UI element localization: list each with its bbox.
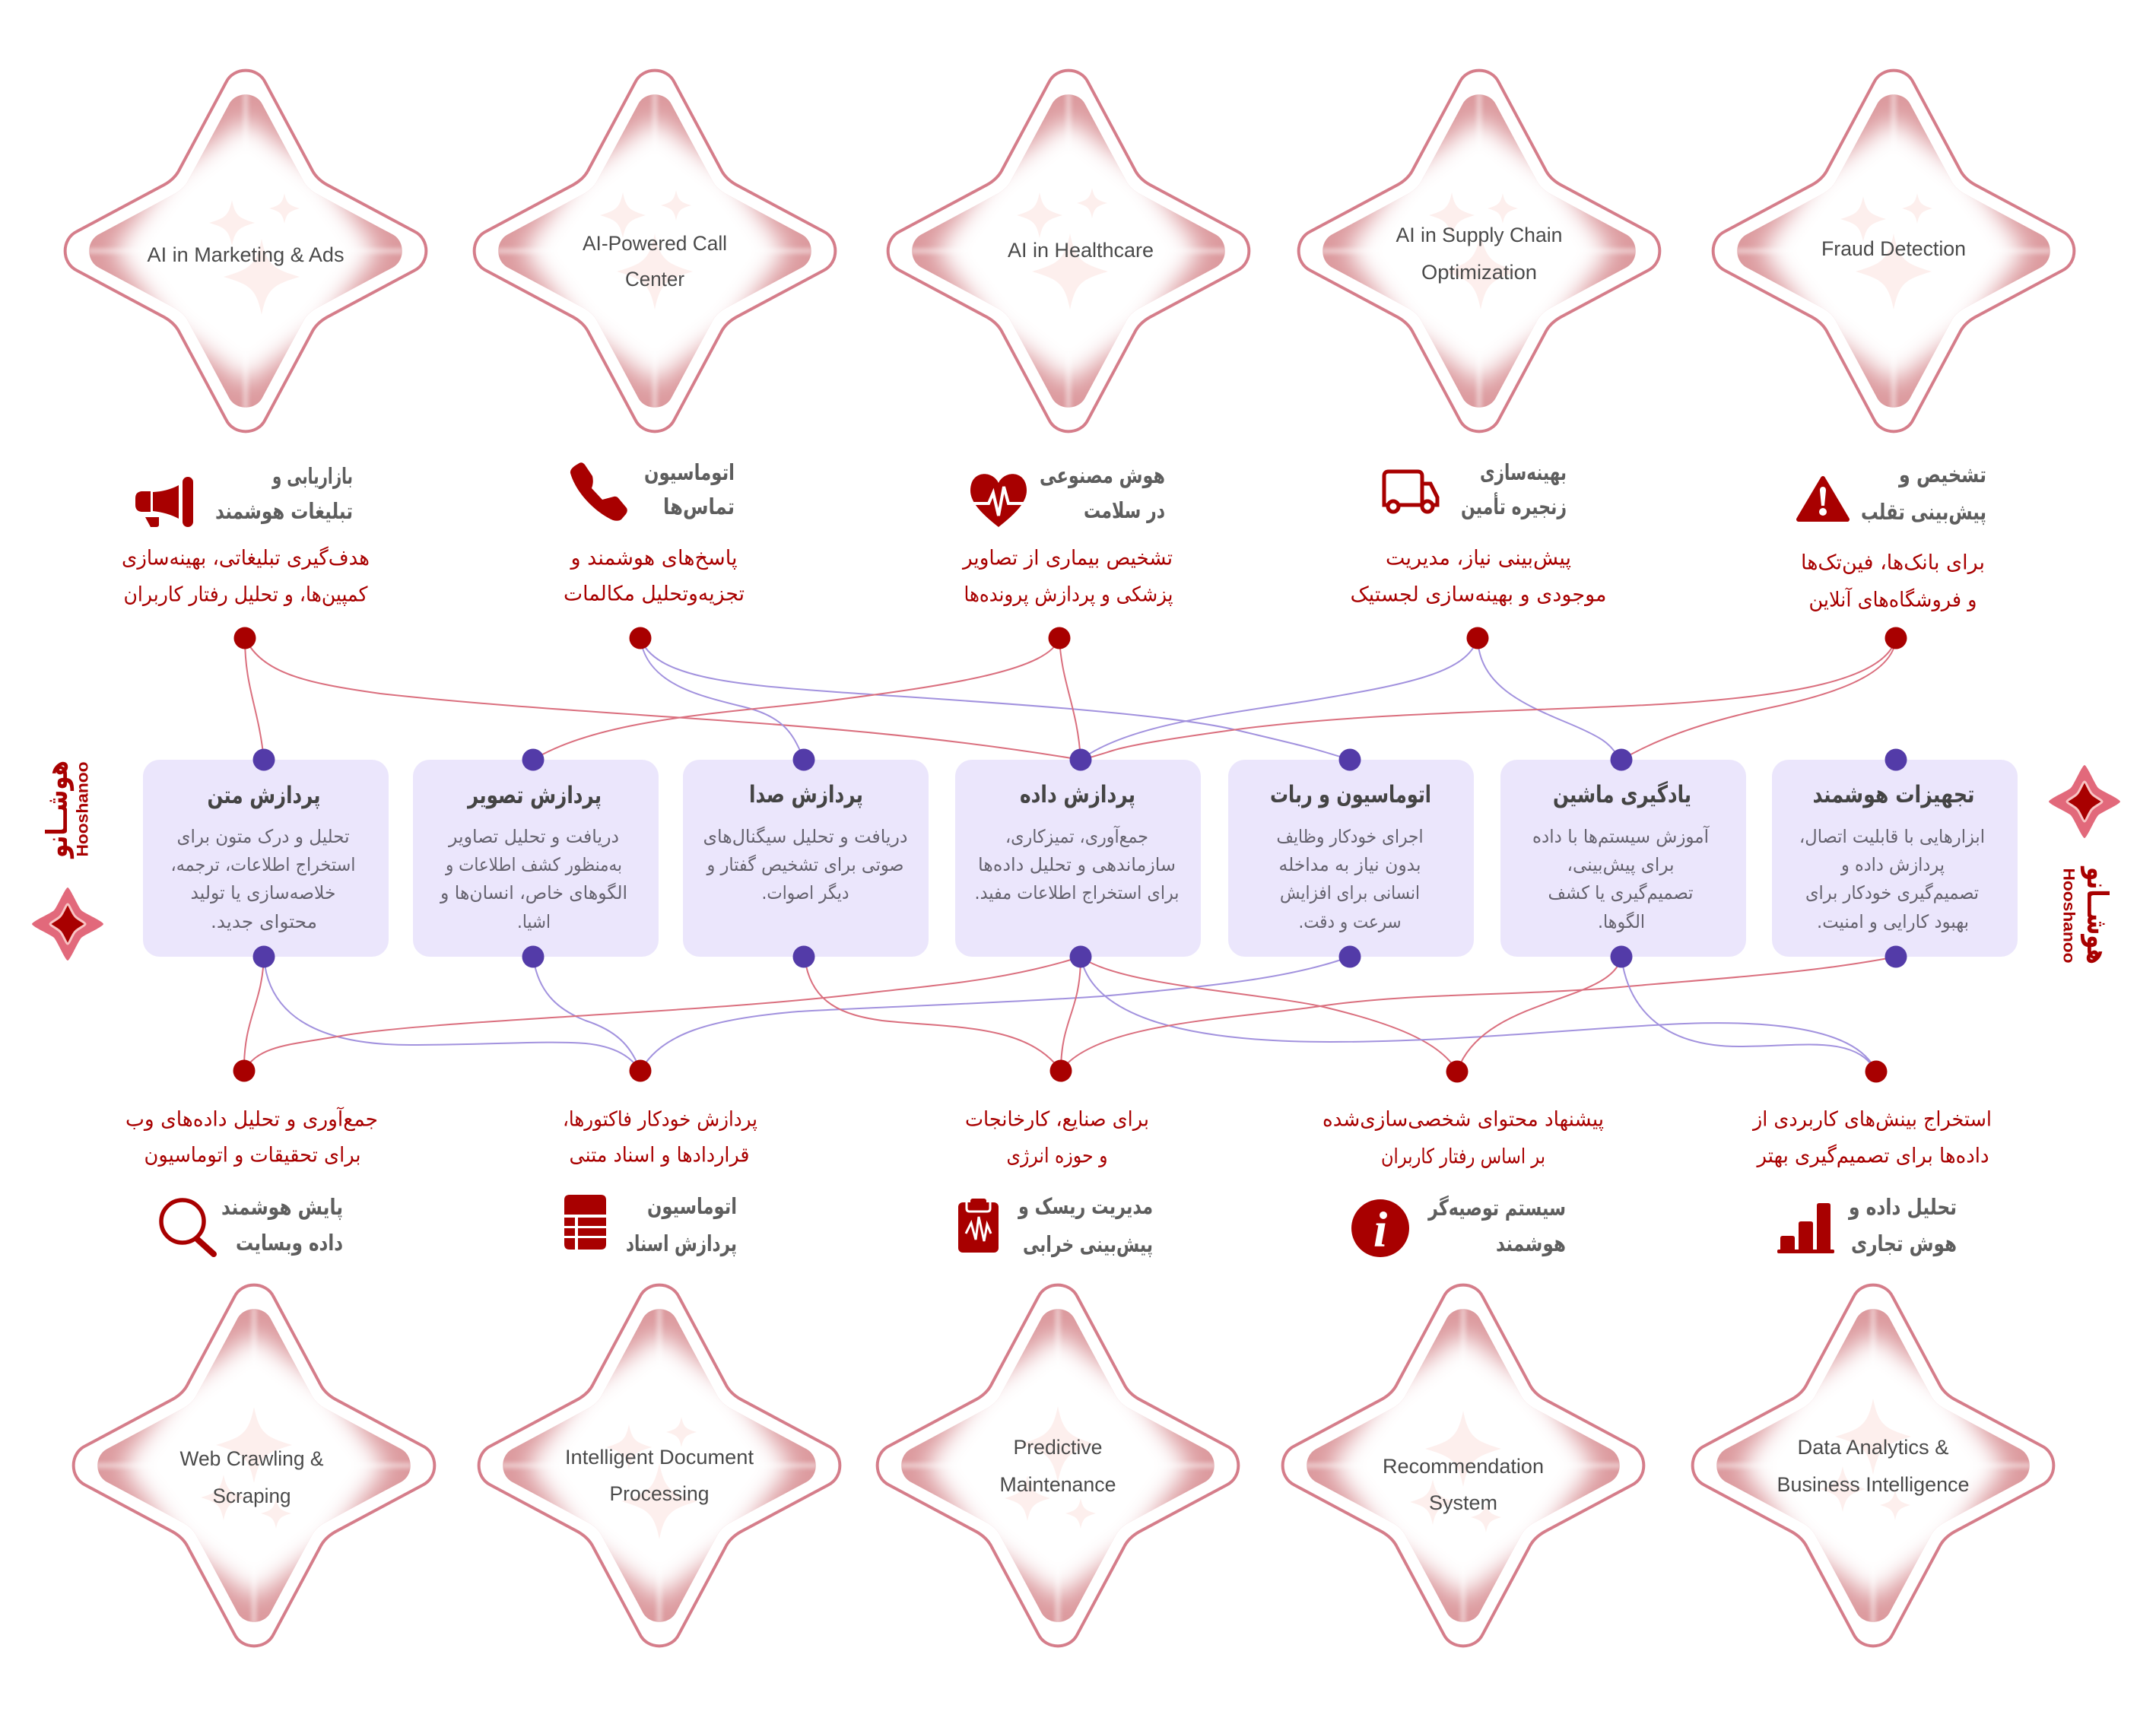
card: machine learning: یادگیری ماشین — [1553, 780, 1691, 808]
heading — [1461, 459, 1567, 519]
card: automation and robotics — [1228, 760, 1474, 957]
card: data processing: سازماندهی و تحلیل داده‌ها — [978, 854, 1176, 875]
card: image processing: اشیا. — [517, 911, 551, 932]
description: برای تحقیقات و اتوماسیون — [144, 1144, 360, 1167]
description — [1801, 551, 1985, 611]
card: audio processing: صوتی برای تشخیص گفتار و — [706, 854, 903, 875]
icon: truck — [1384, 472, 1437, 512]
description — [961, 546, 1173, 607]
card: text processing — [143, 760, 389, 957]
card: text processing: استخراج اطلاعات، ترجمه، — [170, 854, 356, 875]
card: image processing: پردازش تصویر — [466, 782, 602, 809]
card: image processing — [413, 760, 659, 957]
card: automation and robotics: اجرای خودکار وظایف — [1276, 826, 1424, 847]
description — [564, 546, 745, 605]
logo left: star and wordmark: Hooshanoo — [75, 762, 91, 856]
heading: اتوماسیون — [644, 459, 735, 485]
panel: AI in Supply Chain Optimization star: Optimization — [1421, 261, 1537, 284]
description: جمع‌آوری و تحلیل داده‌های وب — [125, 1107, 378, 1132]
heading: تبلیغات هوشمند — [215, 498, 353, 524]
panel: Web Crawling & Scraping star — [74, 1285, 434, 1646]
description: استخراج بینش‌های کاربردی از — [1751, 1107, 1992, 1132]
description: پیشنهاد محتوای شخصی‌سازی‌شده — [1322, 1107, 1604, 1132]
top connector dots — [234, 627, 1907, 649]
panel: Recommendation System star — [1283, 1285, 1643, 1646]
card: smart devices: ابزارهایی با قابلیت اتصال، — [1799, 826, 1985, 847]
heading: تشخیص و — [1897, 462, 1986, 487]
heading: هوش مصنوعی — [1040, 462, 1165, 488]
logo right: star and wordmark: هوشــانو — [2081, 865, 2114, 964]
card: text processing: تحلیل و درک متون برای — [176, 826, 350, 847]
panel: Web Crawling & Scraping star: Web Crawling & — [179, 1447, 324, 1470]
column: marketing heading, icon and description — [122, 463, 370, 607]
card: data processing — [955, 760, 1201, 957]
description: داده‌ها برای تصمیم‌گیری بهتر — [1756, 1144, 1989, 1168]
heading — [1861, 462, 1986, 526]
panel: Data Analytics & Business Intelligence star — [1693, 1285, 2053, 1646]
card: image processing: دریافت و تحلیل تصاویر — [448, 826, 619, 847]
card: audio processing: دیگر اصوات. — [762, 882, 849, 903]
heading: هوش تجاری — [1851, 1231, 1957, 1256]
heading — [1040, 462, 1165, 523]
description: و فروشگاه‌های آنلاین — [1808, 587, 1977, 611]
description — [965, 1107, 1149, 1168]
description: موجودی و بهینه‌سازی لجستیک — [1351, 583, 1606, 607]
card: audio processing: دریافت و تحلیل سیگنال‌های — [703, 826, 908, 847]
heading: پیش‌بینی خرابی — [1023, 1231, 1153, 1258]
description — [563, 1107, 757, 1167]
column: web scraping description, icon and heading — [125, 1107, 378, 1256]
heading: در سلامت — [1084, 497, 1165, 523]
column: analytics description, icon and heading — [1751, 1107, 1992, 1256]
description: برای بانک‌ها، فین‌تک‌ها — [1801, 551, 1985, 575]
heading: تحلیل داده و — [1847, 1194, 1957, 1220]
panel: AI in Supply Chain Optimization star: AI in Supply Chain — [1396, 224, 1562, 246]
heading — [626, 1193, 737, 1257]
description: و حوزه انرژی — [1007, 1144, 1107, 1168]
panel: Intelligent Document Processing star — [479, 1285, 840, 1646]
logo right: star and wordmark — [2049, 765, 2120, 964]
heading: اتوماسیون — [647, 1193, 737, 1219]
panel: AI-Powered Call Center star: AI-Powered Call — [583, 232, 727, 255]
card: automation and robotics: اتوماسیون و ربات — [1270, 781, 1431, 808]
panel: AI in Marketing & Ads star — [65, 71, 426, 431]
heading: داده وبسایت — [236, 1230, 343, 1256]
card: smart devices: پردازش داده و — [1840, 854, 1945, 875]
panel: Intelligent Document Processing star: Intelligent Document — [565, 1446, 754, 1469]
column: healthcare heading, icon and description — [961, 462, 1173, 607]
icon: warning triangle — [1799, 478, 1847, 519]
panel: Predictive Maintenance star: Predictive — [1013, 1436, 1103, 1459]
card: text processing: محتوای جدید. — [211, 911, 317, 932]
description: تشخیص بیماری از تصاویر — [961, 546, 1173, 570]
heading: پیش‌بینی تقلب — [1861, 499, 1986, 526]
card: machine learning: تصمیم‌گیری یا کشف — [1548, 882, 1693, 903]
card: audio processing: پردازش صدا — [749, 781, 863, 808]
panel: AI in Supply Chain Optimization star — [1299, 71, 1659, 431]
icon: document table — [564, 1195, 606, 1250]
card: image processing: الگوهای خاص، انسان‌ها و — [440, 882, 627, 903]
card: smart devices: تصمیم‌گیری خودکار برای — [1805, 882, 1979, 903]
icon: phone — [570, 462, 627, 521]
card: automation and robotics: انسانی برای افزایش — [1280, 882, 1420, 903]
heading — [644, 459, 735, 519]
description — [1322, 1107, 1604, 1168]
card: image processing: به‌منظور کشف اطلاعات و — [445, 854, 622, 875]
card: smart devices: تجهیزات هوشمند — [1813, 781, 1974, 808]
card: text processing: پردازش متن — [207, 782, 321, 809]
description: هدف‌گیری تبلیغاتی، بهینه‌سازی — [122, 546, 370, 570]
card: automation and robotics: بدون نیاز به مداخله — [1279, 854, 1421, 875]
description: پزشکی و پردازش پرونده‌ها — [964, 583, 1173, 607]
column: call center heading, icon and description — [564, 459, 745, 605]
description — [1351, 546, 1606, 607]
panel: Data Analytics & Business Intelligence star: Data Analytics & — [1798, 1436, 1948, 1459]
panel: Data Analytics & Business Intelligence star: Business Intelligence — [1777, 1473, 1970, 1496]
panel: Recommendation System star: System — [1429, 1491, 1497, 1514]
icon: magnifier — [161, 1200, 214, 1254]
icon: info circle: i — [1373, 1202, 1388, 1258]
connector lines: top row to processing cards — [245, 638, 1896, 760]
card: machine learning: برای پیش‌بینی، — [1567, 854, 1675, 875]
heading: بازاریابی و — [271, 463, 353, 489]
logo right: star and wordmark: Hooshanoo — [2059, 869, 2078, 963]
logo left: star and wordmark — [32, 761, 103, 961]
heading — [1427, 1195, 1566, 1256]
description: بر اساس رفتار کاربران — [1381, 1145, 1545, 1168]
column: document processing description, icon and heading — [563, 1107, 757, 1257]
column: recommendation description, icon and heading — [1322, 1107, 1604, 1258]
card: data processing: پردازش داده — [1020, 781, 1135, 808]
panel: AI in Healthcare star — [888, 71, 1249, 431]
card: machine learning: الگوها. — [1598, 911, 1645, 932]
panel: Web Crawling & Scraping star: Scraping — [213, 1485, 291, 1507]
description — [125, 1107, 378, 1167]
column: supply chain heading, icon and description — [1351, 459, 1606, 607]
description — [1751, 1107, 1992, 1168]
panel: AI in Healthcare star: AI in Healthcare — [1008, 239, 1154, 262]
description: پیش‌بینی نیاز، مدیریت — [1386, 546, 1571, 570]
connector lines: processing cards to bottom row — [244, 957, 1896, 1072]
heading — [215, 463, 353, 524]
icon: clipboard with pulse — [958, 1199, 999, 1253]
heading: مدیریت ریسک و — [1017, 1193, 1153, 1219]
icon: heart with pulse — [969, 474, 1028, 527]
heading — [1017, 1193, 1153, 1258]
icon: megaphone — [135, 477, 193, 527]
panel: Predictive Maintenance star: Maintenance — [999, 1473, 1116, 1496]
heading: پایش هوشمند — [221, 1194, 343, 1221]
heading — [221, 1194, 343, 1256]
card: text processing: خلاصه‌سازی یا تولید — [190, 882, 336, 903]
card: audio processing — [683, 760, 929, 957]
card: data processing: جمع‌آوری، تمیزکاری، — [1005, 825, 1148, 847]
card: smart devices — [1772, 760, 2018, 957]
description: قراردادها و اسناد متنی — [569, 1144, 750, 1167]
card: machine learning: آموزش سیستم‌ها با داده — [1532, 825, 1710, 847]
panel: Fraud Detection star — [1713, 71, 2074, 431]
column: predictive maintenance description, icon and heading — [958, 1107, 1153, 1258]
heading: تماس‌ها — [663, 494, 735, 519]
panel: Fraud Detection star: Fraud Detection — [1821, 237, 1966, 260]
logo left: star and wordmark: هوشــانو — [40, 761, 74, 859]
heading: بهینه‌سازی — [1480, 459, 1567, 485]
heading: سیستم توصیه‌گر — [1427, 1195, 1566, 1221]
card: machine learning — [1500, 760, 1746, 957]
card: automation and robotics: سرعت و دقت. — [1299, 911, 1401, 932]
description: کمپین‌ها، و تحلیل رفتار کاربران — [123, 583, 368, 607]
panel: AI-Powered Call Center star: Center — [625, 268, 684, 291]
heading: هوشمند — [1496, 1231, 1566, 1256]
description — [122, 546, 370, 607]
panel: Predictive Maintenance star — [878, 1285, 1238, 1646]
card connector dots — [252, 748, 1907, 967]
description: پردازش خودکار فاکتورها، — [563, 1107, 757, 1132]
panel: AI in Marketing & Ads star: AI in Marketing & Ads — [148, 243, 344, 266]
panel: Recommendation System star: Recommendation — [1383, 1455, 1544, 1478]
heading: زنجیره تأمین — [1461, 492, 1567, 519]
heading: پردازش اسناد — [626, 1231, 737, 1257]
column: fraud heading, icon and description — [1799, 462, 1986, 611]
heading — [1847, 1194, 1957, 1256]
panel: AI-Powered Call Center star — [475, 71, 835, 431]
icon: bar chart — [1777, 1203, 1834, 1253]
description: برای صنایع، کارخانجات — [965, 1107, 1149, 1132]
bottom connector dots — [233, 1060, 1888, 1083]
card: data processing: برای استخراج اطلاعات مفید. — [975, 882, 1179, 903]
panel: Intelligent Document Processing star: Processing — [610, 1482, 709, 1505]
description: پاسخ‌های هوشمند و — [569, 546, 738, 570]
description: تجزیه‌وتحلیل مکالمات — [564, 583, 745, 605]
card: smart devices: بهبود کارایی و امنیت. — [1817, 911, 1969, 932]
icon: info circle — [1351, 1199, 1409, 1258]
